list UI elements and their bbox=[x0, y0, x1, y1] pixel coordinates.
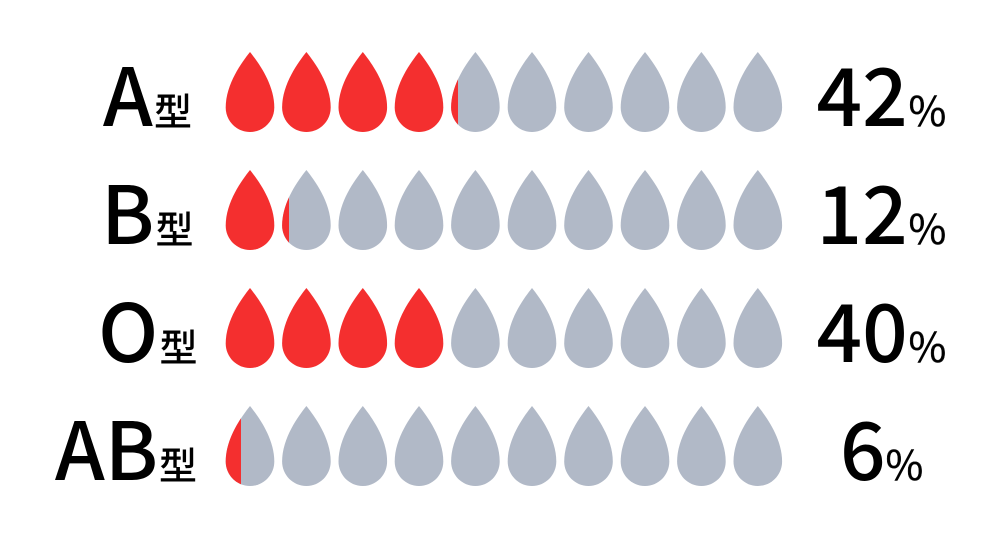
value: 12 percent: % bbox=[908, 196, 946, 256]
label: A type bbox=[103, 34, 192, 150]
value: 40 percent: 40 bbox=[816, 270, 908, 386]
row: B type bbox=[108, 170, 945, 250]
row: AB type bbox=[55, 406, 922, 486]
value: 6 percent: 6 bbox=[840, 388, 886, 504]
label: B type: 型 bbox=[156, 200, 194, 254]
drops: A type 42 percent bbox=[226, 52, 782, 132]
value: 6 percent: % bbox=[886, 432, 923, 492]
label: AB type: 型 bbox=[159, 436, 197, 490]
label: O type: 型 bbox=[160, 318, 198, 372]
label: A type: 型 bbox=[154, 82, 192, 136]
row: A type bbox=[103, 52, 945, 132]
row: O type bbox=[98, 270, 946, 386]
drops: AB type 6 percent bbox=[226, 406, 782, 486]
value: 40 percent: % bbox=[908, 314, 946, 374]
label: O type bbox=[98, 270, 198, 386]
label: A type: A bbox=[103, 34, 153, 150]
value: 12 percent: 12 bbox=[816, 152, 908, 268]
label: B type bbox=[101, 152, 194, 268]
label: AB type: AB bbox=[55, 388, 158, 504]
drops: O type 40 percent bbox=[226, 288, 782, 368]
value: 6 percent bbox=[840, 388, 923, 504]
label: O type: O bbox=[98, 270, 158, 386]
value: 42 percent: 42 bbox=[816, 34, 908, 150]
label: B type: B bbox=[101, 152, 154, 268]
drops: B type 12 percent bbox=[226, 170, 782, 250]
value: 42 percent: % bbox=[908, 78, 946, 138]
